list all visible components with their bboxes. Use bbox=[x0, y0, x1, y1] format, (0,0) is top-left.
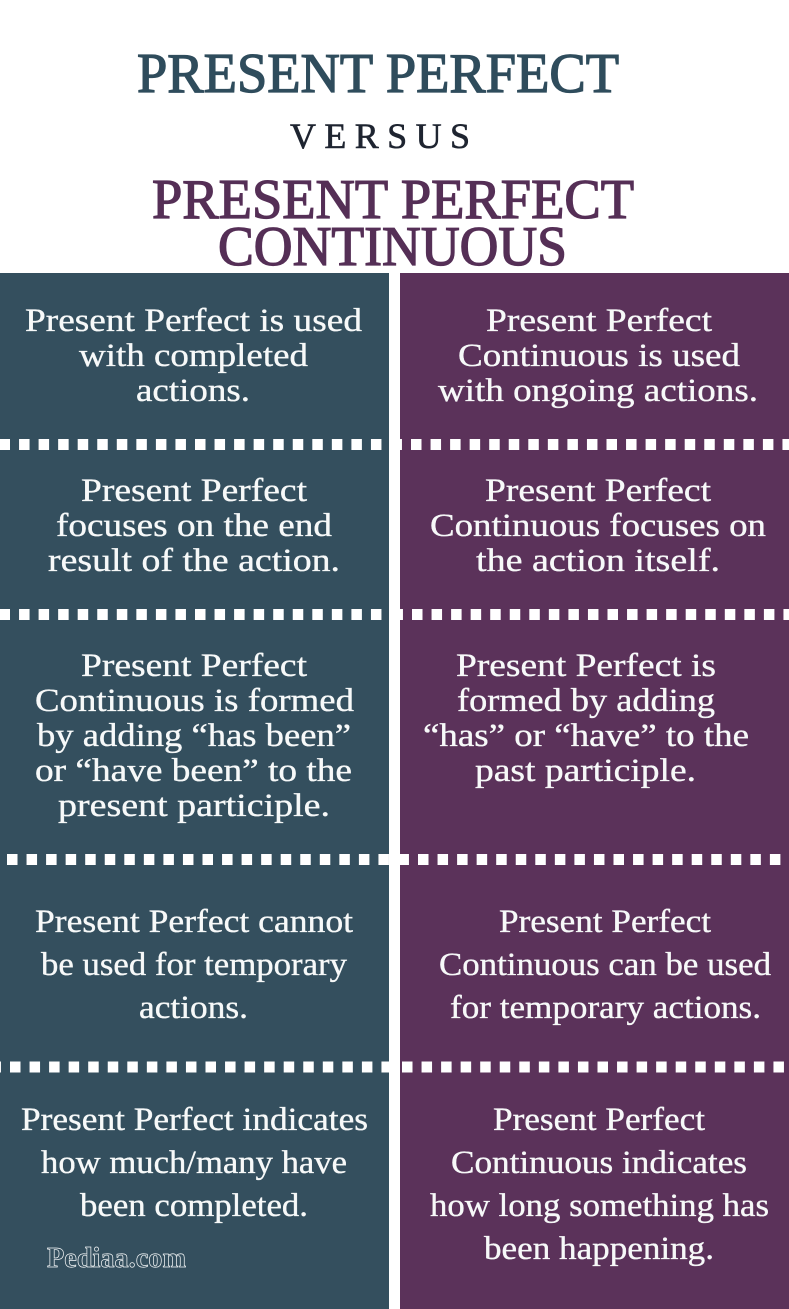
left text: row 3: Present Perfect bbox=[81, 648, 307, 684]
right text: row 2: the action itself. bbox=[476, 543, 720, 579]
title block bbox=[137, 43, 634, 278]
right text: row 2: Continuous focuses on bbox=[430, 508, 766, 544]
panel: present perfect continuous column bbox=[400, 273, 789, 1309]
right text: row 2: Present Perfect bbox=[485, 473, 711, 509]
left text: row 2: focuses on the end bbox=[56, 508, 333, 544]
right text: row 3: Present Perfect is bbox=[456, 648, 716, 684]
right text: row 5: been happening. bbox=[484, 1231, 714, 1267]
left text: row 2: result of the action. bbox=[48, 543, 340, 579]
left text: row 2: Present Perfect bbox=[81, 473, 307, 509]
right text: row 3: past participle. bbox=[475, 753, 696, 789]
right text: row 4: Continuous can be used bbox=[439, 947, 772, 983]
left text: row 5: been completed. bbox=[80, 1188, 308, 1224]
left text: row 4: actions. bbox=[139, 990, 248, 1026]
right text: row 1: Continuous is used bbox=[458, 338, 741, 374]
dotted row dividers bbox=[0, 444, 789, 1067]
right text: row 5: Present Perfect bbox=[493, 1102, 705, 1138]
left text: row 1: actions. bbox=[136, 373, 250, 409]
left text: row 4: be used for temporary bbox=[41, 947, 348, 983]
panel: present perfect column bbox=[0, 273, 389, 1309]
left text: row 1: with completed bbox=[79, 338, 309, 374]
right text: row 4: for temporary actions. bbox=[450, 990, 761, 1026]
heading: present perfect continuous: CONTINUOUS bbox=[218, 216, 567, 278]
right text: row 1: with ongoing actions. bbox=[438, 373, 758, 409]
right text: row 4: Present Perfect bbox=[499, 904, 711, 940]
left text: row 4: Present Perfect cannot bbox=[35, 904, 353, 940]
logo: pediaa.com: Pediaa.com bbox=[47, 1243, 186, 1274]
right text: row 1: Present Perfect bbox=[486, 303, 712, 339]
heading: versus: VERSUS bbox=[290, 116, 470, 156]
heading: present perfect continuous: PRESENT PERFECT bbox=[152, 169, 634, 231]
left text: row 3: Continuous is formed bbox=[35, 683, 355, 719]
heading: present perfect: PRESENT PERFECT bbox=[137, 43, 619, 105]
left text: row 5: Present Perfect indicates bbox=[21, 1102, 368, 1138]
left text: row 1: Present Perfect is used bbox=[25, 303, 363, 339]
left text: row 3: by adding “has been” bbox=[37, 718, 351, 754]
left text: row 3: present participle. bbox=[58, 788, 330, 824]
right text: row 3: “has” or “have” to the bbox=[423, 718, 749, 754]
right text: row 5: how long something has bbox=[430, 1188, 769, 1224]
left text: row 3: or “have been” to the bbox=[35, 753, 352, 789]
left text: row 5: how much/many have bbox=[41, 1145, 347, 1181]
right text: row 5: Continuous indicates bbox=[451, 1145, 747, 1181]
right text: row 3: formed by adding bbox=[457, 683, 715, 719]
